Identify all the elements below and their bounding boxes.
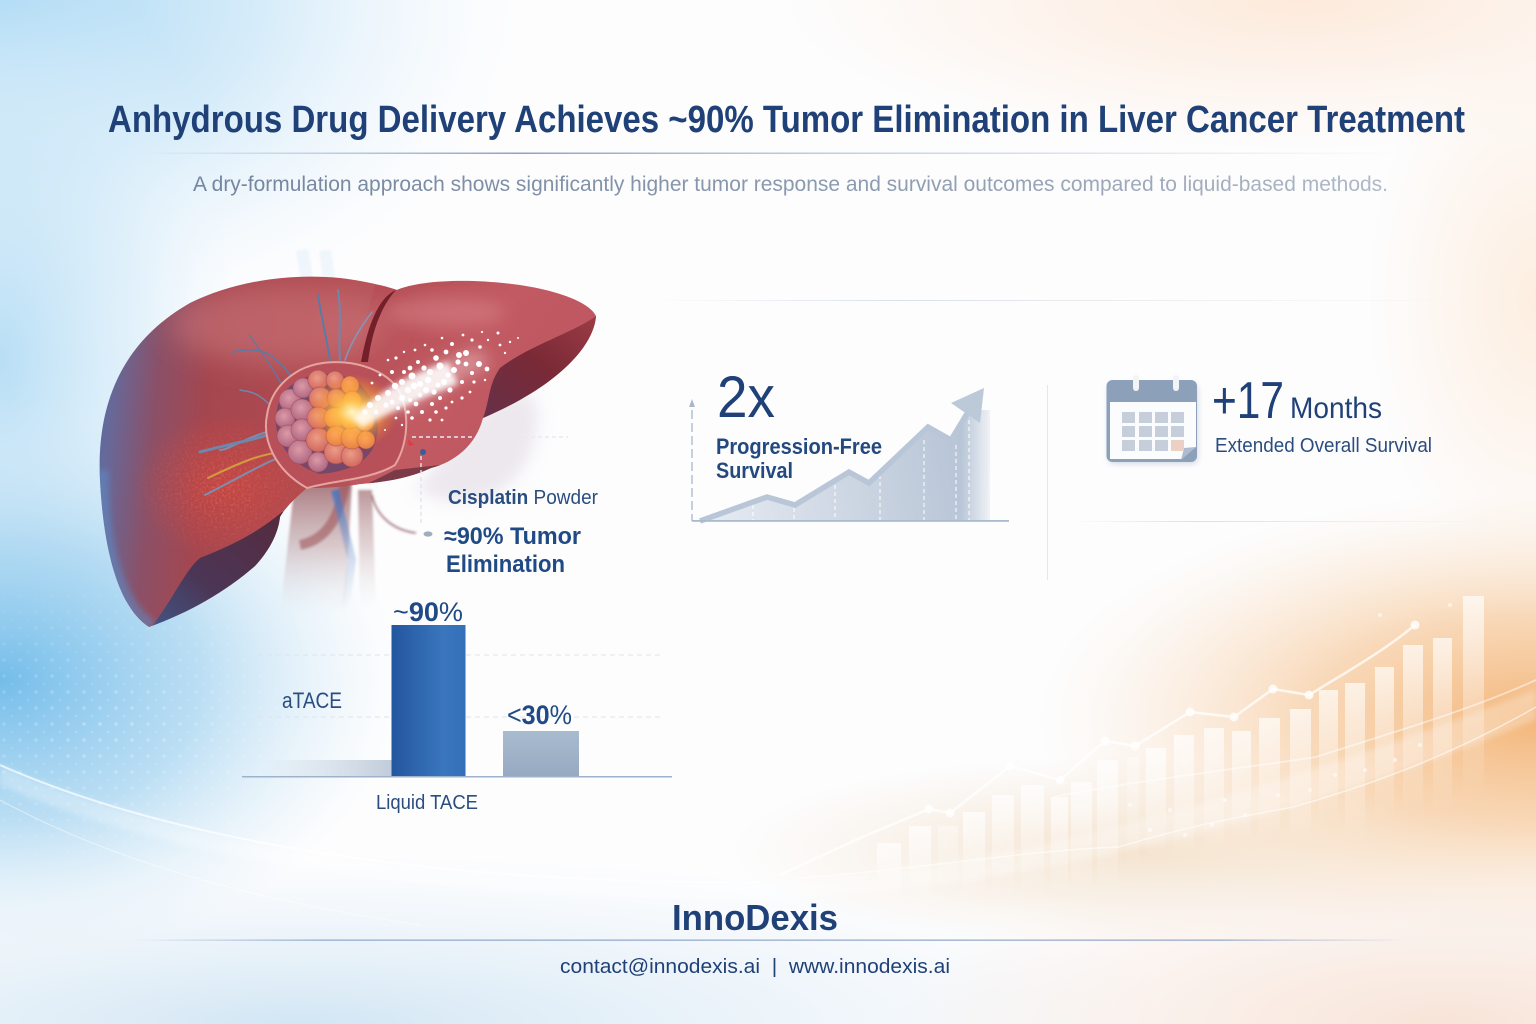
fissure [361, 290, 396, 362]
bar: aTACE [392, 625, 466, 777]
subtitle: A dry-formulation approach shows significantly higher tumor response and survival outcomes compared to liquid-based methods. [193, 173, 1388, 196]
background dot field [2, 626, 230, 806]
drug glow [306, 374, 398, 450]
tumor capsule [266, 362, 406, 488]
liver soft shadow [415, 394, 538, 502]
stat: overall survival [1106, 372, 1432, 464]
label: extended overall survival: Extended Overall Survival [1215, 435, 1432, 457]
bar: Liquid TACE [503, 731, 579, 777]
blood vessels on liver [200, 290, 372, 495]
background growth chart [780, 596, 1536, 900]
label: aTACE: aTACE [282, 688, 342, 713]
value: Liquid TACE: <30% [507, 700, 572, 730]
footer rule [130, 940, 1410, 941]
callout: tumor elimination: Elimination [446, 551, 565, 578]
label: progression-free survival: Progression-Free [716, 434, 882, 459]
background swoosh [0, 690, 1536, 925]
value: 2x: 2x [717, 365, 775, 430]
bar chart: tumor response [242, 597, 672, 814]
icon: calendar [1106, 375, 1198, 464]
cisplatin powder stream [352, 331, 519, 431]
value: aTACE: ~90% [393, 597, 463, 627]
stat: progression-free survival [689, 365, 1009, 522]
label: progression-free survival: Survival [716, 458, 793, 483]
panel rules [650, 300, 1500, 580]
callout leader lines [408, 437, 568, 537]
footer contact: contact@innodexis.ai | www.innodexis.ai [560, 956, 950, 978]
value: +17 months: Months [1290, 392, 1382, 425]
illustration: liver with tumor [90, 250, 610, 640]
callout: cisplatin powder: Cisplatin Powder [448, 487, 598, 509]
value: +17 months: +17 [1212, 372, 1284, 430]
line chart: rising survival [689, 388, 1009, 522]
footer brand: InnoDexis [672, 897, 838, 938]
label: Liquid TACE: Liquid TACE [376, 792, 478, 814]
callout: tumor elimination: ≈90% Tumor [444, 523, 581, 550]
liver body [100, 276, 596, 627]
title rule [140, 152, 1400, 154]
tumor [275, 370, 378, 474]
vessels below the liver [280, 250, 416, 615]
